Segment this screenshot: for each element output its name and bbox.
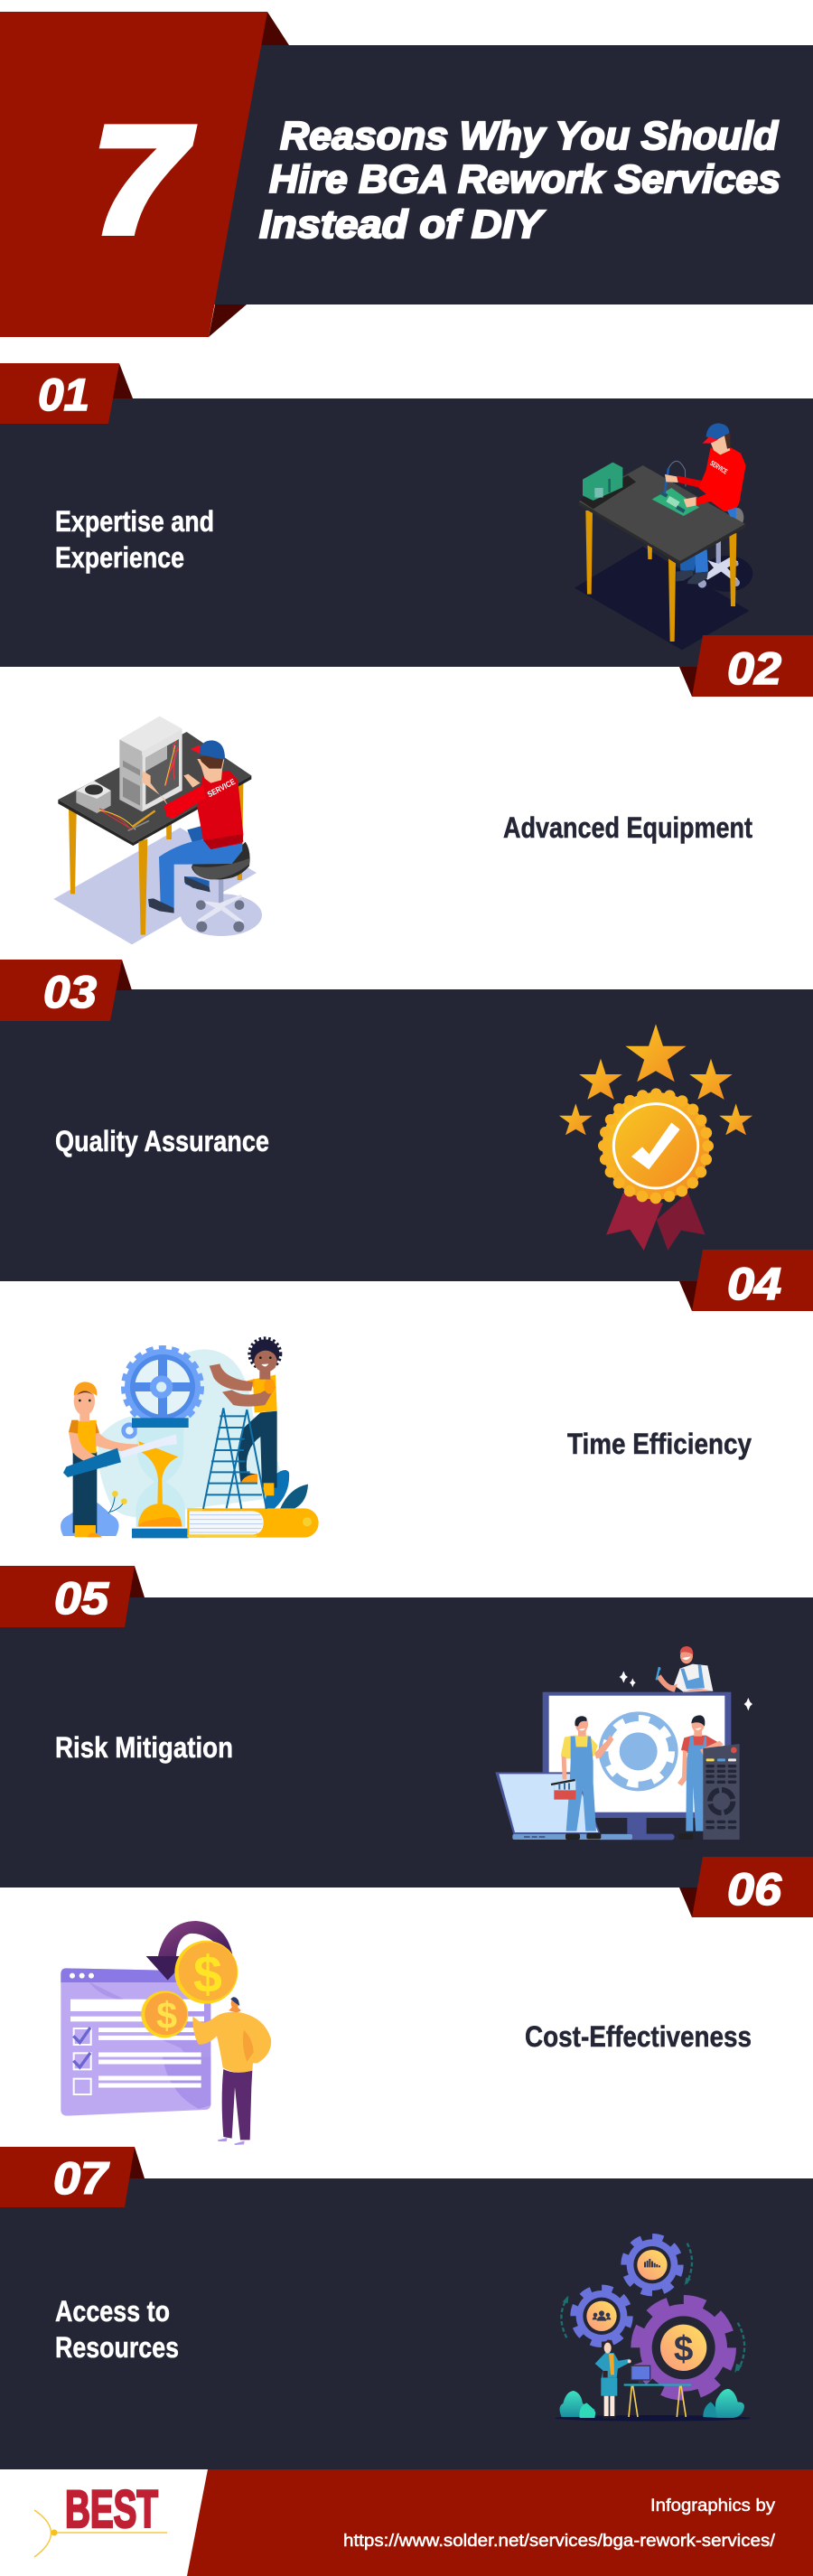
red tab (0, 960, 122, 1021)
footer credit (343, 2496, 776, 2551)
heading: Cost-Effectiveness (525, 2020, 752, 2053)
number: 05 (54, 1573, 109, 1624)
number: 04 (727, 1259, 781, 1309)
icon: gears with businesswoman: $ (674, 2330, 693, 2369)
fold (679, 667, 703, 697)
label: 01 (0, 363, 133, 424)
panel: 02 advanced equipment (53, 717, 752, 944)
panel background (0, 2178, 813, 2469)
label: 05 (0, 1566, 813, 1888)
panel: 04 time efficiency (61, 1338, 752, 1538)
panel: 07 access to resources (0, 2178, 813, 2469)
icon: award medal with stars (559, 1024, 752, 1251)
fold (679, 1281, 703, 1311)
icon: checklist, coins and man: $ (193, 1945, 222, 2003)
icon: workers with gear and hourglass (61, 1338, 319, 1538)
heading: Expertise and (55, 505, 214, 538)
header fold top (258, 12, 289, 45)
number: 07 (53, 2153, 109, 2204)
icon: technician repairing computer (53, 717, 262, 944)
title (259, 114, 780, 247)
label: 02 (679, 635, 813, 697)
heading: Access to (55, 2295, 170, 2328)
label: 07 (0, 2147, 145, 2207)
icon: checklist, coins and man: $ (156, 1995, 177, 2037)
heading: Advanced Equipment (503, 811, 752, 844)
heading: Resources (55, 2331, 179, 2364)
icon: engineers with monitor and remote (495, 1646, 752, 1840)
red tab (0, 2147, 135, 2207)
heading: Risk Mitigation (55, 1731, 233, 1764)
red tab (692, 1857, 813, 1917)
logo: BEST: BEST (65, 2480, 158, 2539)
red tab (0, 363, 119, 424)
label: 06 (679, 1857, 813, 1917)
fold (125, 2147, 145, 2178)
red tab (692, 635, 813, 697)
fold (125, 1566, 145, 1597)
number: 06 (727, 1864, 782, 1915)
header dark panel (181, 45, 813, 304)
header red panel (0, 12, 267, 337)
icon: gears with businesswoman (555, 2237, 751, 2421)
panel: 05 risk mitigation (0, 1597, 813, 1888)
fold (679, 1888, 703, 1917)
red tab (0, 1566, 135, 1627)
icon: technician at soldering desk: SERVICE (709, 459, 729, 476)
heading: Quality Assurance (55, 1125, 269, 1157)
panel background (0, 989, 813, 1281)
heading (55, 505, 214, 574)
panel: 03 quality assurance (0, 989, 813, 1281)
title: Hire BGA Rework Services (269, 157, 780, 201)
number: 03 (43, 967, 97, 1017)
heading: Time Efficiency (567, 1428, 752, 1460)
title: Reasons Why You Should (280, 114, 779, 158)
footer credit: Infographics by (650, 2496, 776, 2515)
red tab (692, 1250, 813, 1311)
footer (34, 2469, 813, 2576)
icon: technician repairing computer: SERVICE (206, 777, 237, 799)
panel background (0, 398, 813, 667)
header banner (0, 12, 813, 337)
panel background (0, 1597, 813, 1888)
label: 04 (679, 1250, 813, 1311)
footer credit: https://www.solder.net/services/bga-rework-services/ (343, 2532, 776, 2551)
heading: Experience (55, 541, 184, 574)
header fold bottom (209, 304, 247, 337)
footer red panel (187, 2469, 813, 2576)
icon: technician at soldering desk (575, 423, 752, 650)
number: 02 (727, 643, 781, 694)
big number seven: 7 (92, 95, 192, 265)
heading (55, 2295, 179, 2364)
number: 01 (38, 370, 89, 420)
panel: 06 cost-effectiveness (61, 1921, 752, 2145)
logo: BEST (34, 2480, 167, 2557)
icon: checklist, coins and man (61, 1921, 271, 2145)
fold (112, 363, 133, 398)
label: 03 (0, 960, 132, 1021)
panel: 01 expertise and experience (0, 398, 813, 667)
fold (113, 960, 132, 990)
title: Instead of DIY (259, 202, 546, 247)
